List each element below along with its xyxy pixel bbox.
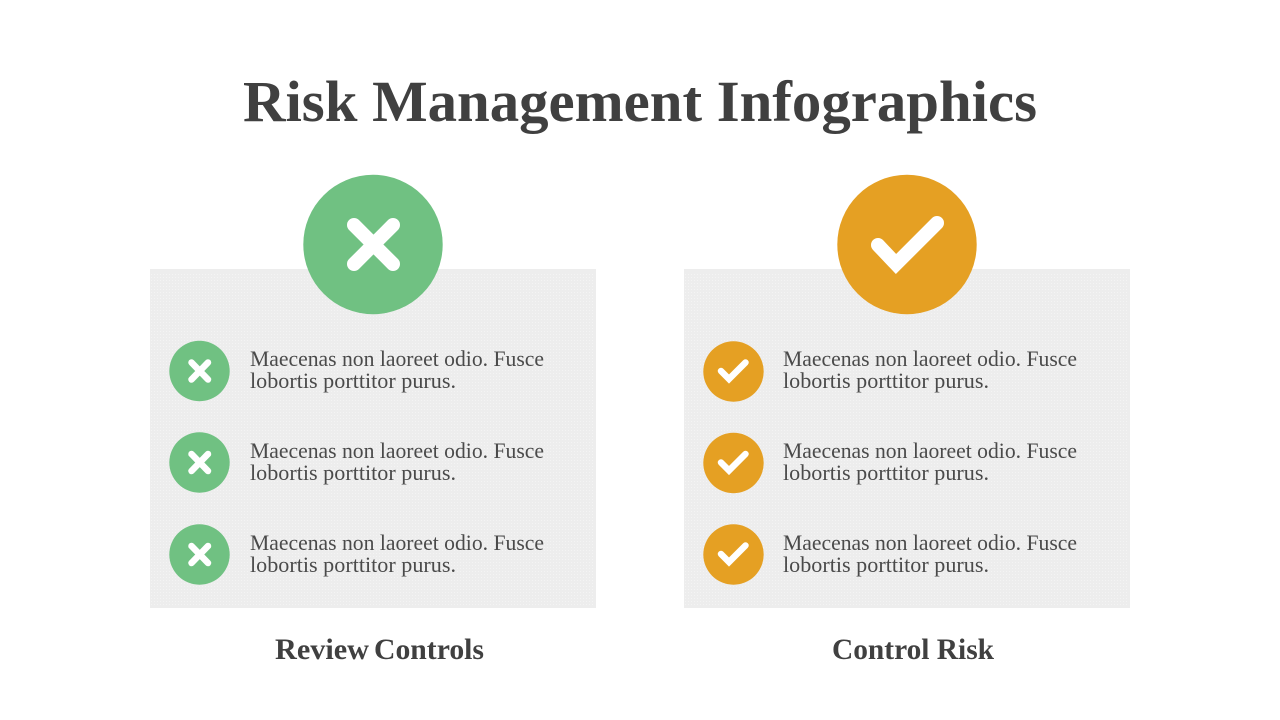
panel background xyxy=(150,269,596,608)
heading: review controls: Controls xyxy=(374,634,484,666)
panel: control risk xyxy=(684,175,1130,608)
heading: control risk: Control Risk xyxy=(832,634,995,666)
item 1: Maecenas non laoreet odio. Fusce xyxy=(783,346,1077,371)
title: Risk Management Infographics xyxy=(243,69,1037,134)
item 3 xyxy=(703,524,1077,585)
item 2: Maecenas non laoreet odio. Fusce xyxy=(783,438,1077,463)
icon: large cross xyxy=(303,175,443,314)
item 2: lobortis porttitor purus. xyxy=(783,460,989,485)
item 2 xyxy=(703,433,1077,493)
item 3: lobortis porttitor purus. xyxy=(250,552,456,577)
item 1: Maecenas non laoreet odio. Fusce xyxy=(250,346,544,371)
icon: large check xyxy=(837,175,977,314)
item 3 xyxy=(169,524,544,585)
item 2: Maecenas non laoreet odio. Fusce xyxy=(250,438,544,463)
item 1: lobortis porttitor purus. xyxy=(783,368,989,393)
item 1 xyxy=(169,341,544,401)
item 3: Maecenas non laoreet odio. Fusce xyxy=(783,530,1077,555)
panel: review controls xyxy=(150,175,596,608)
panel background xyxy=(684,269,1130,608)
item 3: Maecenas non laoreet odio. Fusce xyxy=(250,530,544,555)
heading: review controls xyxy=(275,634,484,666)
heading: review controls: Review xyxy=(275,634,370,666)
item 1: lobortis porttitor purus. xyxy=(250,368,456,393)
item 2 xyxy=(169,432,544,493)
item 2: lobortis porttitor purus. xyxy=(250,460,456,485)
item 1 xyxy=(703,341,1077,402)
item 3: lobortis porttitor purus. xyxy=(783,552,989,577)
